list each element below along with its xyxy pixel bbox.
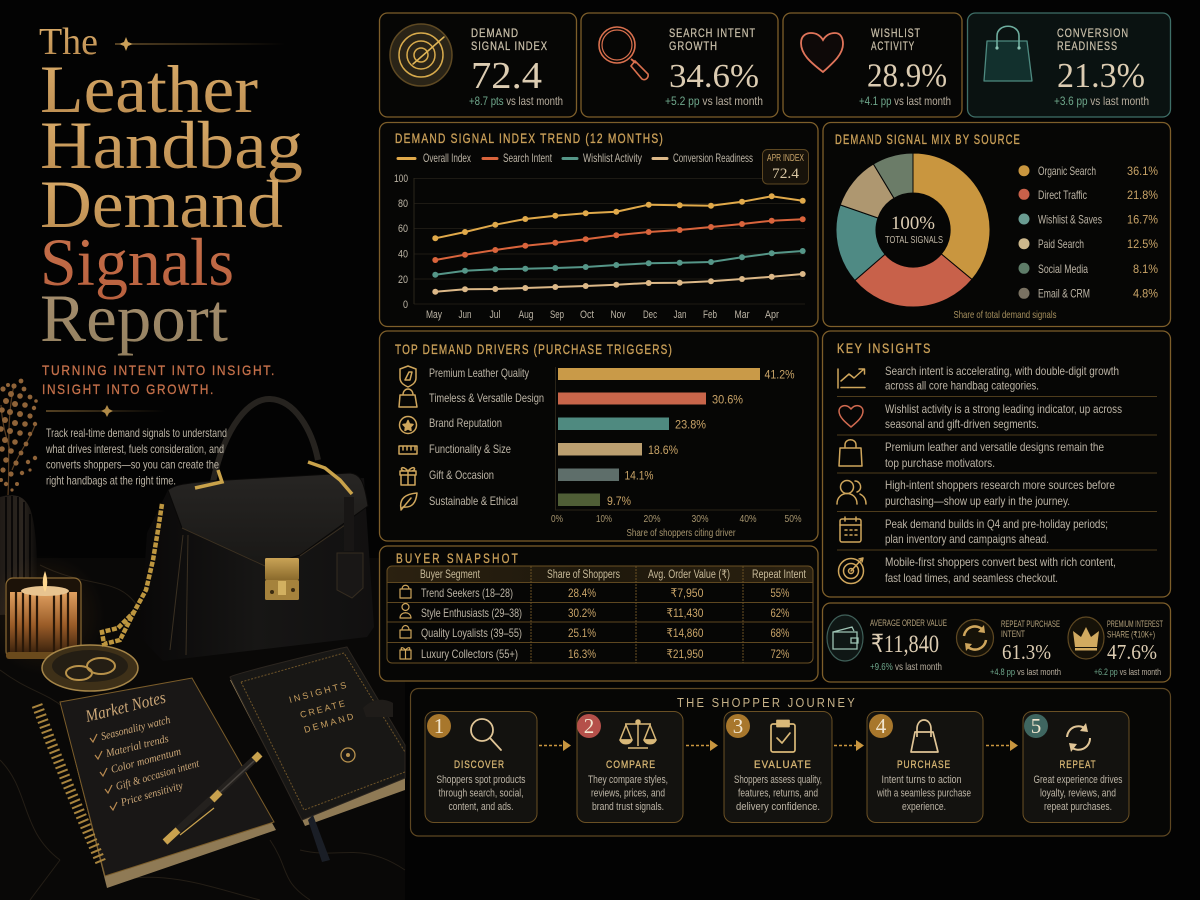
insight text: Wishlist activity is a strong leading indicator, up across	[885, 402, 1122, 416]
panel: secondary KPI strip: ₹11,840	[871, 631, 939, 658]
horizontal bar chart: 9.7%	[607, 494, 631, 508]
table rows: 68%	[770, 626, 790, 640]
panel: demand signal mix donut: DEMAND SIGNAL MIX BY SOURCE	[835, 132, 1021, 147]
dried flowers	[0, 379, 38, 495]
callout: april index: APR INDEX	[767, 153, 804, 164]
KPI card: wishlist activity: +4.1 pp vs last month	[859, 94, 951, 108]
panel: secondary KPI strip: REPEAT PURCHASE	[1001, 619, 1060, 630]
panel: trend line chart	[380, 122, 818, 326]
arrow 4	[986, 740, 1018, 751]
insight icons	[837, 369, 866, 584]
step 4: purchase: experience.	[902, 801, 946, 813]
donut legend: Paid Search	[1038, 237, 1084, 251]
intro paragraph: Track real-time demand signals to understand	[46, 426, 227, 440]
market notes handwriting: Color momentum	[110, 746, 182, 776]
intro paragraph	[45, 426, 227, 488]
candle glow	[0, 555, 105, 675]
market notes handwriting: Gift & occasion intent	[115, 757, 201, 793]
insight text: Premium leather and versatile designs remain the	[885, 440, 1104, 454]
step 3: evaluate: features, returns, and	[738, 788, 818, 800]
donut legend: 36.1%	[1127, 164, 1158, 178]
table rows: 16.3%	[568, 647, 596, 661]
ribbed vase	[0, 495, 37, 615]
step 2: compare: 2	[584, 714, 594, 738]
table row icons	[400, 585, 411, 659]
table rows: Trend Seekers (18–28)	[421, 586, 513, 600]
horizontal bar chart	[551, 367, 802, 539]
chart axes and grid: Jan	[674, 309, 686, 321]
panel: secondary KPI strip: 61.3%	[1002, 640, 1051, 664]
KPI card: demand signal index: +8.7 pts vs last month	[469, 94, 563, 108]
KPI card: demand signal index	[380, 13, 576, 117]
chart axes and grid: Dec	[643, 309, 657, 321]
chart axes and grid: 20	[398, 274, 408, 286]
icon: heart	[801, 33, 843, 72]
step 3: evaluate: Shoppers assess quality,	[734, 774, 822, 786]
title: Leather	[40, 51, 258, 127]
donut legend	[1018, 164, 1158, 300]
gold chain	[102, 504, 162, 644]
panel: secondary KPI strip: +9.6% vs last month	[870, 661, 942, 673]
black leather handbag	[102, 399, 374, 661]
chart axes and grid: Aug	[518, 309, 534, 321]
donut legend: 16.7%	[1127, 212, 1158, 226]
insight text: seasonal and gift-driven segments.	[885, 417, 1039, 431]
chart axes and grid: Nov	[610, 309, 626, 321]
panel: secondary KPI strip	[822, 603, 1170, 682]
title: Signals	[40, 224, 234, 300]
chart axes and grid: Oct	[580, 309, 594, 321]
chart axes and grid: Apr	[765, 309, 779, 321]
insight text: top purchase motivators.	[885, 456, 995, 470]
step 1: discover	[425, 712, 537, 822]
market notes handwriting	[83, 688, 201, 810]
table rows: ₹21,950	[666, 647, 704, 661]
insight text: Search intent is accelerating, with double-digit growth	[885, 364, 1119, 378]
table rows: 28.4%	[568, 586, 596, 600]
chart axes and grid: 60	[398, 223, 408, 235]
insight text: purchasing—show up early in the journey.	[885, 494, 1070, 508]
step 4: purchase: Intent turns to action	[882, 774, 962, 786]
table header: Avg. Order Value (₹)	[648, 569, 730, 581]
panel: top demand drivers: TOP DEMAND DRIVERS (PURCHASE TRIGGERS)	[395, 342, 673, 357]
step 2: compare: reviews, prices, and	[591, 788, 665, 800]
horizontal bar chart: 20%	[644, 513, 660, 525]
table rows: Style Enthusiasts (29–38)	[421, 606, 522, 620]
brass clasp	[265, 558, 299, 600]
KPI card: wishlist activity	[783, 13, 962, 117]
step 3: evaluate: 3	[733, 714, 743, 738]
step 3: evaluate: EVALUATE	[754, 759, 812, 771]
leather journal	[230, 647, 405, 862]
insight dividers	[837, 396, 1157, 550]
chart axes and grid: 80	[398, 198, 408, 210]
horizontal bar chart: 30.6%	[712, 392, 743, 406]
KPI card: conversion readiness: 21.3%	[1057, 56, 1145, 95]
horizontal bar chart: 0%	[551, 513, 563, 525]
step 5: repeat: repeat purchases.	[1044, 801, 1112, 813]
panel: secondary KPI strip: +4.8 pp vs last month	[990, 667, 1061, 678]
driver labels: Functionality & Size	[429, 442, 511, 456]
table rows: 72%	[770, 647, 790, 661]
insight text: Mobile-first shoppers convert best with rich content,	[885, 555, 1116, 569]
donut legend: 4.8%	[1133, 286, 1158, 300]
panel: buyer snapshot table: BUYER SNAPSHOT	[396, 551, 520, 566]
tagline	[42, 362, 276, 397]
icon: crown	[1068, 617, 1104, 659]
tagline: TURNING INTENT INTO INSIGHT.	[42, 362, 276, 378]
step 3: evaluate	[724, 712, 832, 822]
horizontal bar chart: 10%	[596, 513, 612, 525]
panel: demand signal mix donut: Share of total demand signals	[954, 309, 1056, 321]
horizontal bar chart: 50%	[784, 513, 802, 525]
black pen	[165, 754, 260, 842]
table frame	[387, 566, 813, 663]
brass dish with rings	[42, 645, 138, 691]
donut legend: 8.1%	[1133, 262, 1158, 276]
step 4: purchase: 4	[876, 714, 887, 738]
step 2: compare: They compare styles,	[588, 774, 668, 786]
panel: secondary KPI strip: INTENT	[1001, 629, 1025, 640]
KPI card: search intent growth: GROWTH	[669, 39, 718, 53]
title: The	[39, 21, 98, 63]
KPI card: wishlist activity: ACTIVITY	[871, 39, 915, 53]
table rows: ₹7,950	[670, 586, 704, 600]
KPI card: wishlist activity: 28.9%	[867, 58, 947, 94]
KPI card: conversion readiness: CONVERSION	[1057, 26, 1129, 40]
chart axes and grid: Mar	[734, 309, 750, 321]
driver labels: Sustainable & Ethical	[429, 494, 518, 508]
donut legend: Social Media	[1038, 262, 1088, 276]
icon: wallet	[827, 615, 863, 661]
table rows: ₹11,430	[666, 606, 704, 620]
title	[39, 21, 303, 356]
table header: Share of Shoppers	[547, 569, 620, 581]
arrow 3	[834, 740, 864, 751]
line: overall index	[432, 193, 806, 241]
table rows: Luxury Collectors (55+)	[421, 647, 518, 661]
KPI card: demand signal index: SIGNAL INDEX	[471, 39, 548, 53]
icon: shopping bag	[984, 26, 1032, 81]
marble table	[0, 558, 405, 900]
panel: the shopper journey: THE SHOPPER JOURNEY	[677, 696, 857, 710]
table header: Buyer Segment	[420, 569, 481, 581]
step 4: purchase: PURCHASE	[897, 759, 951, 771]
donut chart	[836, 153, 990, 307]
table rows: 25.1%	[568, 626, 596, 640]
horizontal bar chart: Share of shoppers citing driver	[626, 527, 736, 539]
panel: key insights: KEY INSIGHTS	[837, 341, 932, 356]
step 2: compare	[577, 712, 683, 822]
panel: demand signal mix donut	[823, 122, 1170, 326]
panel: secondary KPI strip: SHARE (₹10K+)	[1107, 630, 1155, 640]
donut legend: 21.8%	[1127, 188, 1158, 202]
step 2: compare: COMPARE	[606, 759, 656, 771]
step 3: evaluate: delivery confidence.	[736, 801, 820, 813]
horizontal bar chart: 41.2%	[764, 368, 795, 382]
KPI card: wishlist activity: WISHLIST	[871, 26, 921, 40]
panel: top demand drivers	[380, 331, 818, 541]
horizontal bar chart: 18.6%	[648, 443, 678, 457]
step 1: discover: Shoppers spot products	[436, 774, 526, 786]
title: Handbag	[40, 107, 303, 183]
arrow 1	[539, 740, 571, 751]
KPI card: search intent growth: SEARCH INTENT	[669, 26, 756, 40]
step 4: purchase	[867, 712, 983, 822]
panel: secondary KPI strip: PREMIUM INTEREST	[1107, 619, 1163, 629]
panel: secondary KPI strip: 47.6%	[1107, 640, 1157, 664]
panel: the shopper journey	[410, 688, 1170, 836]
step 5: repeat	[1023, 712, 1129, 822]
market notes handwriting: Seasonality watch	[100, 714, 172, 743]
horizontal bar chart: 30%	[692, 513, 708, 525]
donut chart: TOTAL SIGNALS	[885, 235, 943, 246]
chart legend: Overall Index	[423, 151, 471, 165]
horizontal bar chart: 23.8%	[675, 418, 706, 432]
hang tag	[337, 497, 363, 598]
market notes handwriting: Market Notes	[83, 688, 168, 726]
step 5: repeat: Great experience drives	[1034, 774, 1123, 786]
icon: radar target	[390, 24, 452, 86]
driver labels	[429, 366, 544, 508]
icon: magnifier	[599, 27, 648, 80]
tagline divider	[46, 405, 165, 417]
chart legend	[398, 151, 753, 165]
horizontal bar chart: 40%	[740, 513, 756, 525]
step 2: compare: brand trust signals.	[592, 801, 664, 813]
driver icons	[399, 366, 417, 510]
intro paragraph: what drives interest, fuels consideration, and	[45, 442, 224, 456]
spiral notebook	[37, 678, 276, 888]
donut legend: Email & CRM	[1038, 286, 1090, 300]
tagline: INSIGHT INTO GROWTH.	[42, 381, 215, 397]
KPI card: conversion readiness: +3.6 pp vs last month	[1054, 94, 1149, 108]
embossed motto: INSIGHTS	[288, 680, 348, 705]
chart axes and grid: 0	[403, 299, 408, 311]
market notes handwriting: Price sensitivity	[119, 780, 184, 809]
embossed motto: DEMAND	[303, 711, 355, 735]
donut legend: Organic Search	[1038, 164, 1096, 178]
intro paragraph: converts shoppers—so you can create the	[46, 458, 219, 472]
line: conversion readiness	[432, 271, 806, 295]
icon: repeat arrows	[956, 620, 994, 656]
table header: Repeat Intent	[752, 569, 807, 581]
donut legend: Direct Traffic	[1038, 188, 1087, 202]
chart axes and grid: Feb	[703, 309, 717, 321]
step 5: repeat: loyalty, reviews, and	[1040, 788, 1116, 800]
step 1: discover: DISCOVER	[454, 759, 505, 771]
line: search intent	[432, 216, 806, 263]
callout: april index: 72.4	[772, 166, 800, 182]
lit candle	[6, 571, 81, 659]
KPI card: demand signal index: 72.4	[471, 55, 542, 97]
table rows: 62%	[770, 606, 790, 620]
chart legend: Wishlist Activity	[583, 151, 642, 165]
KPI card: search intent growth	[581, 13, 778, 117]
panel: secondary KPI strip: +6.2 pp vs last month	[1094, 667, 1161, 678]
panel: key insights	[822, 331, 1170, 597]
step 1: discover: content, and ads.	[448, 801, 514, 813]
insight text	[885, 364, 1122, 585]
title flourish	[115, 37, 285, 51]
driver labels: Timeless & Versatile Design	[429, 391, 544, 405]
step 1: discover: 1	[434, 714, 444, 738]
callout: april index	[762, 150, 808, 184]
donut legend: Wishlist & Saves	[1038, 212, 1102, 226]
KPI card: search intent growth: +5.2 pp vs last month	[665, 94, 763, 108]
insight text: High-intent shoppers research more sources before	[885, 478, 1115, 492]
embossed motto: CREATE	[299, 698, 346, 720]
title: Demand	[40, 166, 283, 242]
panel: buyer snapshot table	[380, 546, 818, 681]
panel: secondary KPI strip: AVERAGE ORDER VALUE	[870, 618, 947, 629]
insight text: across all core handbag categories.	[885, 378, 1039, 392]
intro paragraph: right handbags at the right time.	[46, 474, 176, 488]
chart axes and grid: Jul	[490, 309, 500, 321]
KPI card: search intent growth: 34.6%	[669, 58, 759, 95]
market notes handwriting: Material trends	[104, 733, 170, 760]
step 1: discover: through search, social,	[438, 788, 524, 800]
driver labels: Gift & Occasion	[429, 468, 494, 482]
chart axes and grid: 40	[398, 248, 408, 260]
KPI card: conversion readiness	[968, 13, 1170, 117]
title: Report	[40, 280, 228, 356]
step 5: repeat: 5	[1031, 714, 1041, 738]
panel: trend line chart: DEMAND SIGNAL INDEX TREND (12 MONTHS)	[395, 131, 664, 146]
product still life scene	[0, 379, 405, 900]
step 4: purchase: with a seamless purchase	[876, 788, 971, 800]
driver labels: Brand Reputation	[429, 416, 502, 430]
driver labels: Premium Leather Quality	[429, 366, 529, 380]
insight text: plan inventory and campaigns ahead.	[885, 532, 1049, 546]
donut chart: 100%	[891, 213, 935, 234]
table rows: 55%	[770, 586, 790, 600]
table header	[420, 569, 807, 581]
table rows: Quality Loyalists (39–55)	[421, 626, 522, 640]
chart axes and grid: 100	[394, 173, 408, 185]
chart legend: Search Intent	[503, 151, 552, 165]
chart axes and grid: Sep	[550, 309, 564, 321]
horizontal bar chart: 14.1%	[624, 468, 654, 482]
insight text: fast load times, and seamless checkout.	[885, 571, 1058, 585]
chart axes and grid: Jun	[458, 309, 472, 321]
chart legend: Conversion Readiness	[673, 151, 753, 165]
chart axes and grid: May	[426, 309, 442, 321]
KPI card: conversion readiness: READINESS	[1057, 39, 1118, 53]
chart axes and grid	[394, 173, 805, 321]
step 5: repeat: REPEAT	[1060, 759, 1096, 771]
table rows	[421, 586, 790, 661]
donut legend: 12.5%	[1127, 237, 1158, 251]
table rows: ₹14,860	[666, 626, 704, 640]
embossed motto	[288, 680, 355, 762]
line: wishlist activity	[432, 248, 806, 278]
insight text: Peak demand builds in Q4 and pre-holiday periods;	[885, 517, 1108, 531]
KPI card: demand signal index: DEMAND	[471, 26, 519, 40]
table rows: 30.2%	[568, 606, 596, 620]
arrow 2	[686, 740, 718, 751]
